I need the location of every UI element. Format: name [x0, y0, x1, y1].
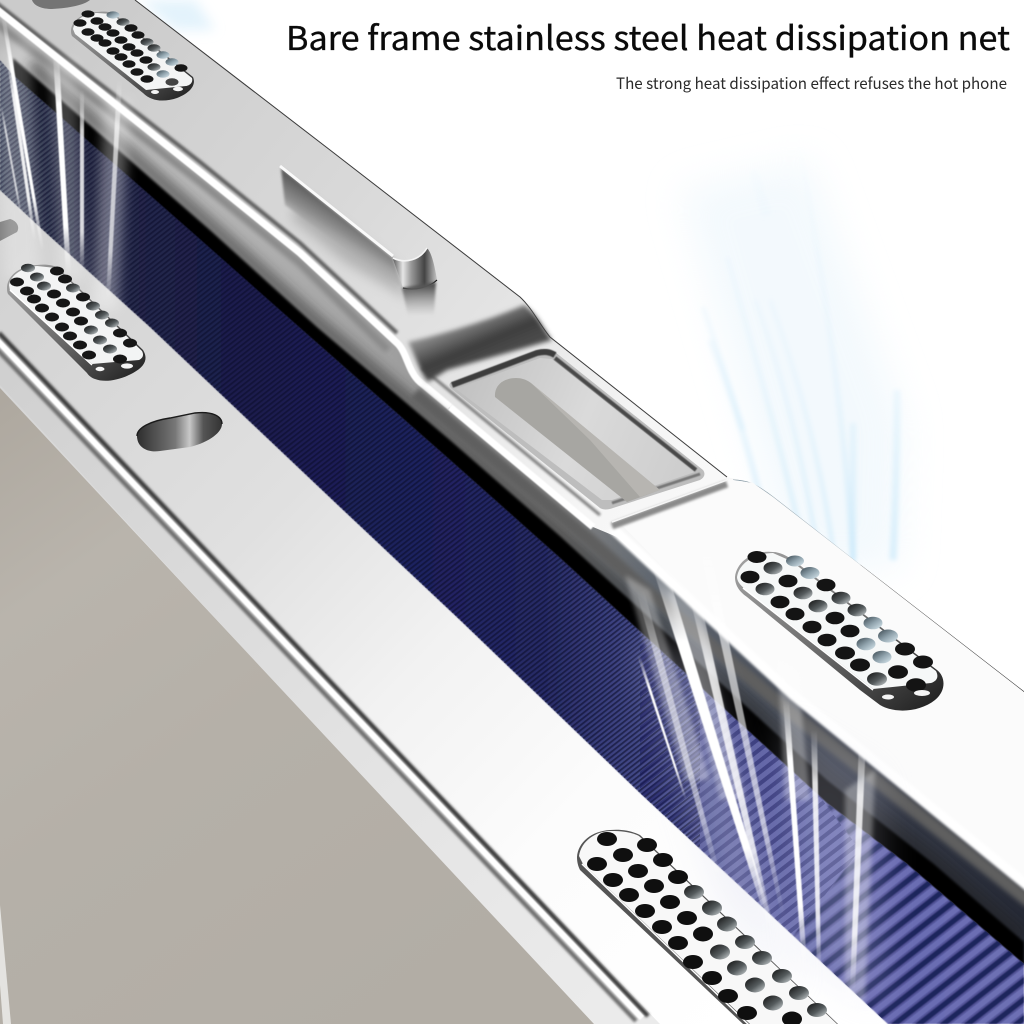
oval slot lower left: [137, 413, 222, 451]
airflow: blue streaks rising from right vent: [680, 150, 905, 570]
window inner pill: [495, 378, 660, 502]
airflow: blue haze above top-left vent: [140, 0, 215, 30]
button end cap: [393, 248, 437, 289]
panel: right frame section: [620, 479, 1024, 885]
lower frame rail: [0, 333, 648, 1021]
oval slot top edge: [32, 0, 90, 9]
bar button raised on frame: [280, 166, 437, 316]
lower frame bevel: [0, 335, 660, 1024]
vent mesh plate: left: [7, 264, 146, 381]
airflow: white streaks through right side of net: [625, 540, 880, 1010]
frame bump shadow: [408, 305, 552, 382]
title: Bare frame stainless steel heat dissipation net: [286, 12, 1010, 60]
airflow: white streaks top left: [0, 15, 130, 310]
panel: titanium back plate: [0, 388, 594, 1024]
panel: lower stainless steel frame face: [0, 172, 888, 1024]
recessed rectangular window: [449, 349, 704, 510]
oval slot left edge: [0, 219, 18, 241]
subtitle: The strong heat dissipation effect refuses the hot phone: [616, 72, 1007, 94]
vent mesh plate: right: [735, 551, 944, 711]
section step edge: [612, 480, 727, 526]
vent mesh plate: bottom: [577, 830, 838, 1024]
vent mesh plate: top left: [71, 10, 194, 101]
